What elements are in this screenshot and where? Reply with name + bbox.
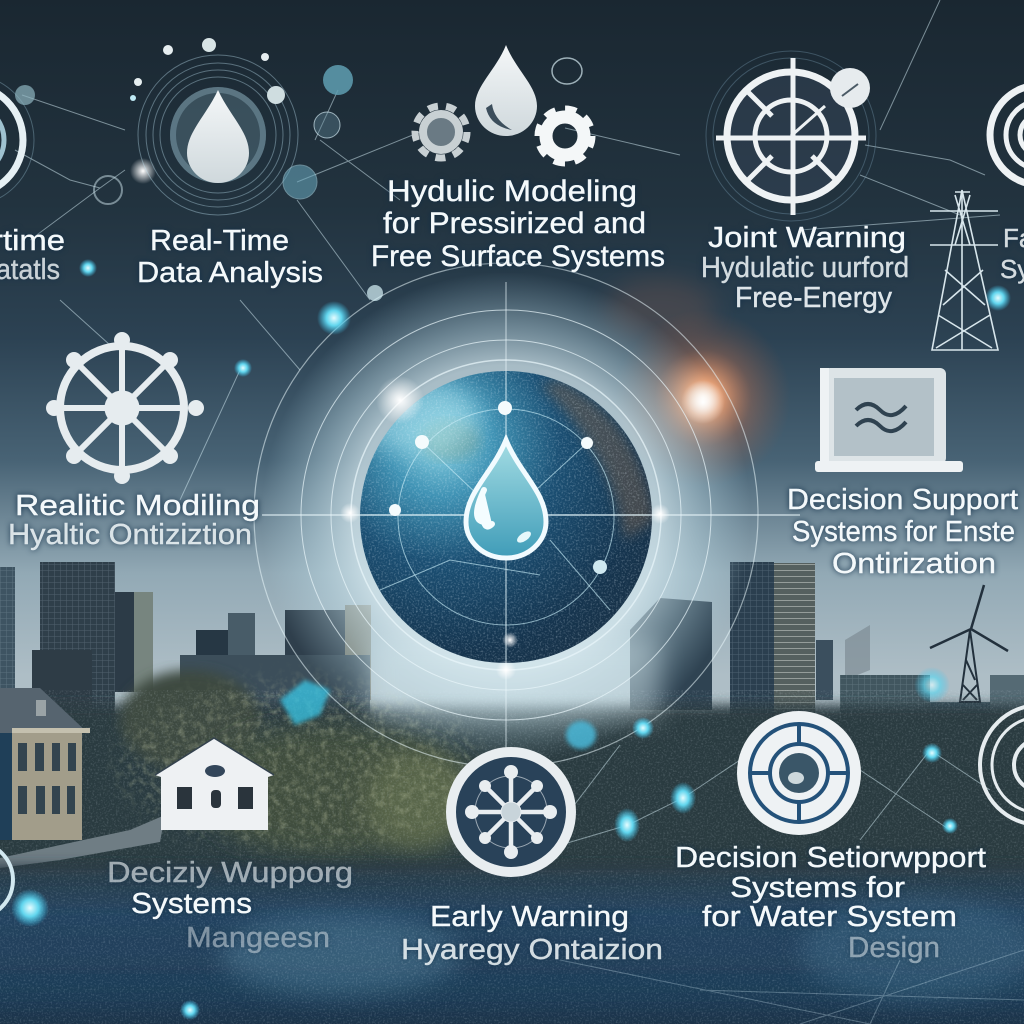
label: joint warning: Hydulatic uurford [701,252,909,284]
icon: central water drop [466,440,546,558]
icon: lower-left ring [0,842,13,918]
icon: laptop chart [815,368,963,472]
icon: top water drop and gears [415,45,591,162]
label: decision water system [675,842,986,964]
label: decision water system: Systems for [730,872,905,904]
label: hydraulic modeling: Free Surface Systems [371,240,665,273]
label: early warning: Hyaregy Ontaizion [401,934,663,966]
label: real-time left [0,225,65,286]
icon: early warning wheel [451,752,571,872]
label: decision water system: Design [848,932,940,964]
central globe [350,370,655,663]
label: decision support lower left faded: Deciziy Wupporg [107,857,353,889]
label: hydraulic modeling: for Pressirized and [383,207,646,240]
label: joint warning: Joint Warning [708,222,906,254]
label: joint warning: Free-Energy [735,282,892,314]
right towers [630,562,1024,792]
label: decision support: Decision Support [787,484,1018,516]
label: real-time data analysis: Data Analysis [137,257,323,289]
label: realistic modeling: Hyaltic Ontiziztion [8,519,252,551]
wind turbine [930,585,1008,702]
label: decision support lower left faded: Mangeesn [186,922,330,954]
left towers [0,562,371,762]
icon: left edge target [0,74,34,206]
label: decision water system: for Water System [702,901,957,933]
icon: gear left [415,106,467,158]
label: real-time data analysis [137,225,323,289]
orange flare [605,278,791,486]
icon: compass wheel [706,51,876,221]
halo around globe [261,272,751,762]
label: hydraulic modeling [371,175,665,273]
label: decision support: Ontirization [832,548,996,580]
icon: real-time data water drop [15,38,353,215]
label: decision support: Systems for Enste [792,516,1015,548]
icon: gear right [539,110,591,162]
icon: ship wheel [46,332,204,484]
city skyline [0,562,1024,792]
globe nodes [340,376,670,680]
label: decision water system: Decision Setiorwpport [675,842,986,874]
label: hydraulic modeling: Hydulic Modeling [387,175,637,208]
network rings [254,263,800,800]
icon: concentric target [737,711,861,835]
label: real-time data analysis: Real-Time [150,225,289,257]
trees and ground [0,660,1024,880]
historic building [0,688,90,840]
label: early warning: Early Warning [430,901,629,933]
icon: transmission tower [930,190,998,350]
city overlap haze [370,640,660,720]
label: realistic modeling: Realitic Modiling [15,490,260,522]
label: decision support [787,484,1018,580]
label: joint warning [701,222,909,314]
water [0,866,1024,1024]
label: far right [1000,223,1024,284]
label: decision support lower left faded: Systems [131,888,252,920]
icon: right edge target [990,85,1024,185]
label: realistic modeling [8,490,260,551]
label: decision support lower left faded [107,857,353,954]
road path [0,815,165,868]
icon: house [155,738,274,830]
icon: right edge lower target [980,705,1024,825]
label: early warning [401,901,663,966]
